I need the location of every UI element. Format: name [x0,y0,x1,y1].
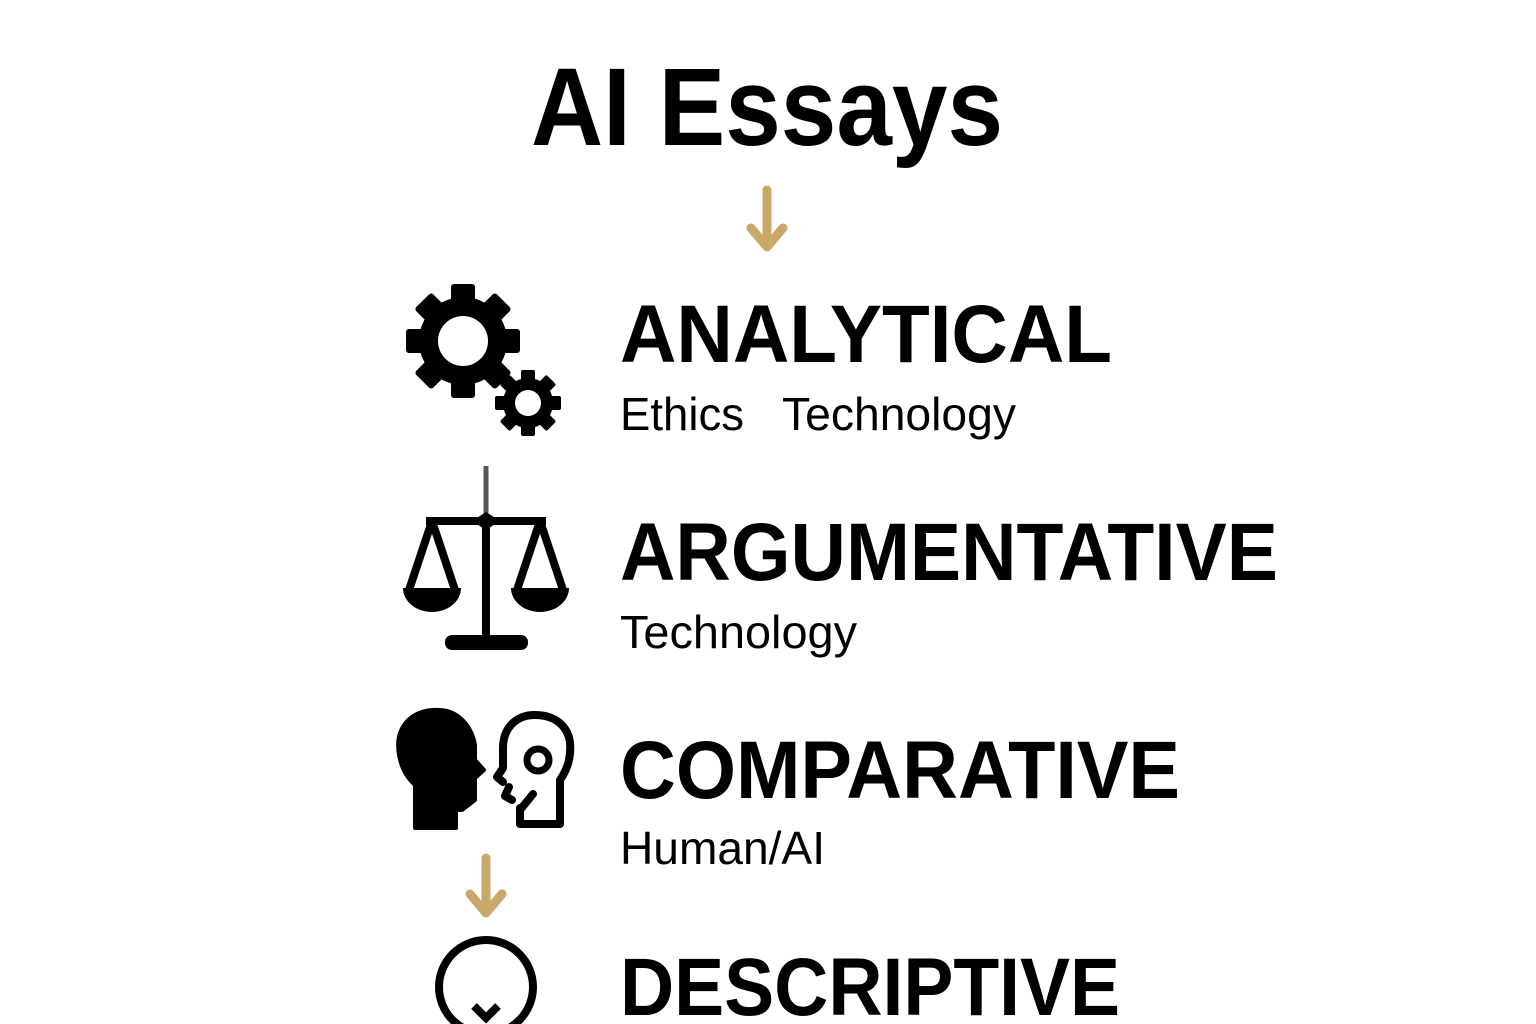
heading: comparative: COMPARATIVE [620,725,1180,816]
subtitle: comparative topic: Human/AI [620,822,825,874]
subtitle: argumentative topic: Technology [620,606,857,658]
icon: heads [398,710,570,828]
icon: gears [406,284,561,436]
icon: check circle [439,940,533,1024]
arrow: bottom [470,858,502,913]
icon: scales [403,466,569,650]
heading: analytical: ANALYTICAL [620,289,1112,380]
title: AI Essays [531,46,1003,169]
arrow: top [751,190,783,247]
subtitle: analytical topics: Ethics [620,388,744,440]
subtitle: analytical topics: Technology [782,388,1016,440]
subtitle: analytical topics [620,388,1016,440]
heading: argumentative: ARGUMENTATIVE [620,507,1278,598]
